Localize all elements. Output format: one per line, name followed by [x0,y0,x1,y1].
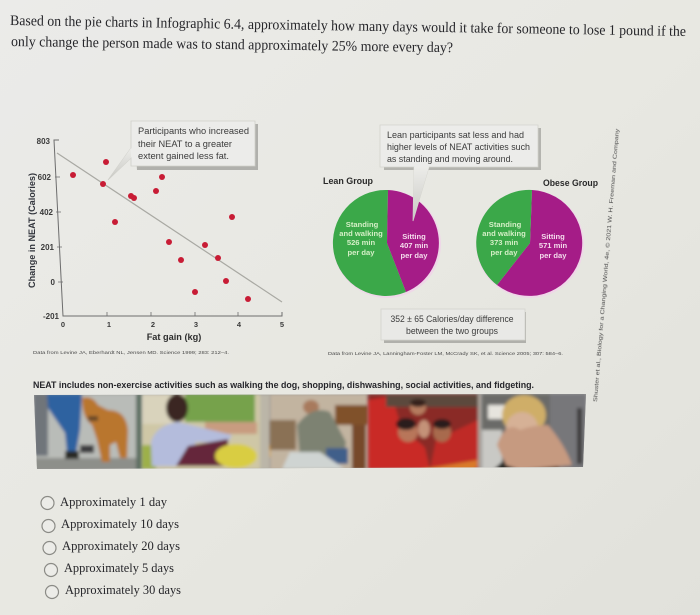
pie: lean group: 526 min [347,238,376,247]
y axis labels: 0 [51,278,56,287]
callout: calorie difference: between the two groups [406,326,498,336]
photo: fidgeting [482,394,586,470]
y axis labels [37,137,60,321]
option 5: Approximately 30 days [65,583,181,597]
photo strip [34,394,586,470]
axis ticks [55,177,238,316]
pie: lean group: 407 min [400,241,429,250]
x axis labels: 3 [194,320,198,329]
y axis labels: 201 [41,243,55,252]
callout: participants: their NEAT to a greater [138,139,233,150]
scatter plot: NEAT versus fat gain [26,121,284,355]
callout: lean participants: as standing and moving around. [387,153,513,164]
photo: walking the dog [34,394,142,470]
y axis labels: 402 [40,208,54,217]
pie: obese group [476,190,584,298]
data points [70,159,251,302]
pie charts panel [323,125,598,356]
option 3: Approximately 20 days [62,539,180,553]
photo: social activities [368,394,482,470]
x axis labels [61,320,284,329]
answer options [41,495,181,598]
pie: lean group: Sitting [402,232,426,241]
x axis labels: 0 [61,320,65,329]
pie: obese group: Sitting [541,232,565,241]
question text: only change the person made was to stand approximately 25% more every day? [11,34,453,56]
photo: shopping [142,394,278,470]
y axis title: Change in NEAT (Calories) [26,173,37,288]
callout: lean participants: higher levels of NEAT activities such [387,141,530,152]
x axis labels: 2 [151,320,155,329]
option 2: Approximately 10 days [61,517,179,531]
x axis title: Fat gain (kg) [147,332,201,342]
pie: lean group: and walking [339,229,383,238]
callout: calorie difference [381,309,526,343]
pie: lean group: per day [347,248,375,257]
y axis and x axis [54,140,282,316]
pie: lean group [333,190,441,298]
pie: lean group: per day [400,251,428,260]
callout: participants: Participants who increased [138,126,249,137]
y axis labels: -201 [43,312,60,321]
y axis labels: 602 [38,173,52,182]
photo: dishwashing [270,394,368,470]
x axis labels: 1 [107,320,111,329]
photo caption: NEAT includes non-exercise activities such as walking the dog, shopping, dishwashing, social activities, and fidgeting. [33,380,534,390]
heading: lean group: Lean Group [323,176,373,186]
pie: obese group: 571 min [539,241,568,250]
callout: participants [108,121,258,180]
source note: Data from Levine JA, Eberhardt NL, Jensen MD. Science 1999; 283: 212–4. [33,350,229,355]
option 1: Approximately 1 day [60,495,168,509]
callout: lean participants: Lean participants sat less and had [387,129,524,140]
trend line [57,153,282,302]
pie: lean group: Standing [346,220,379,229]
pie: obese group: Standing [489,220,522,229]
option 4: Approximately 5 days [64,561,174,575]
source note: Data from Levine JA, Lanningham-Foster LM, McCrady SK, et al. Science 2005; 307: 584–6. [328,351,563,356]
heading: obese group: Obese Group [543,178,598,188]
x axis labels: 5 [280,320,284,329]
x axis labels: 4 [237,320,242,329]
pie: obese group: per day [539,251,567,260]
y axis labels: 803 [37,137,51,146]
pie: obese group: per day [490,248,518,257]
pie: obese group: 373 min [490,238,519,247]
callout: participants: extent gained less fat. [138,151,229,162]
question text [10,13,686,56]
callout: calorie difference: 352 ± 65 Calories/day difference [390,314,514,324]
pie: obese group: and walking [482,229,526,238]
callout: lean participants [380,125,541,221]
vertical credit: Shuster et al., Biology for a Changing World, 4e, © 2021 W. H. Freeman and Company [592,128,621,402]
